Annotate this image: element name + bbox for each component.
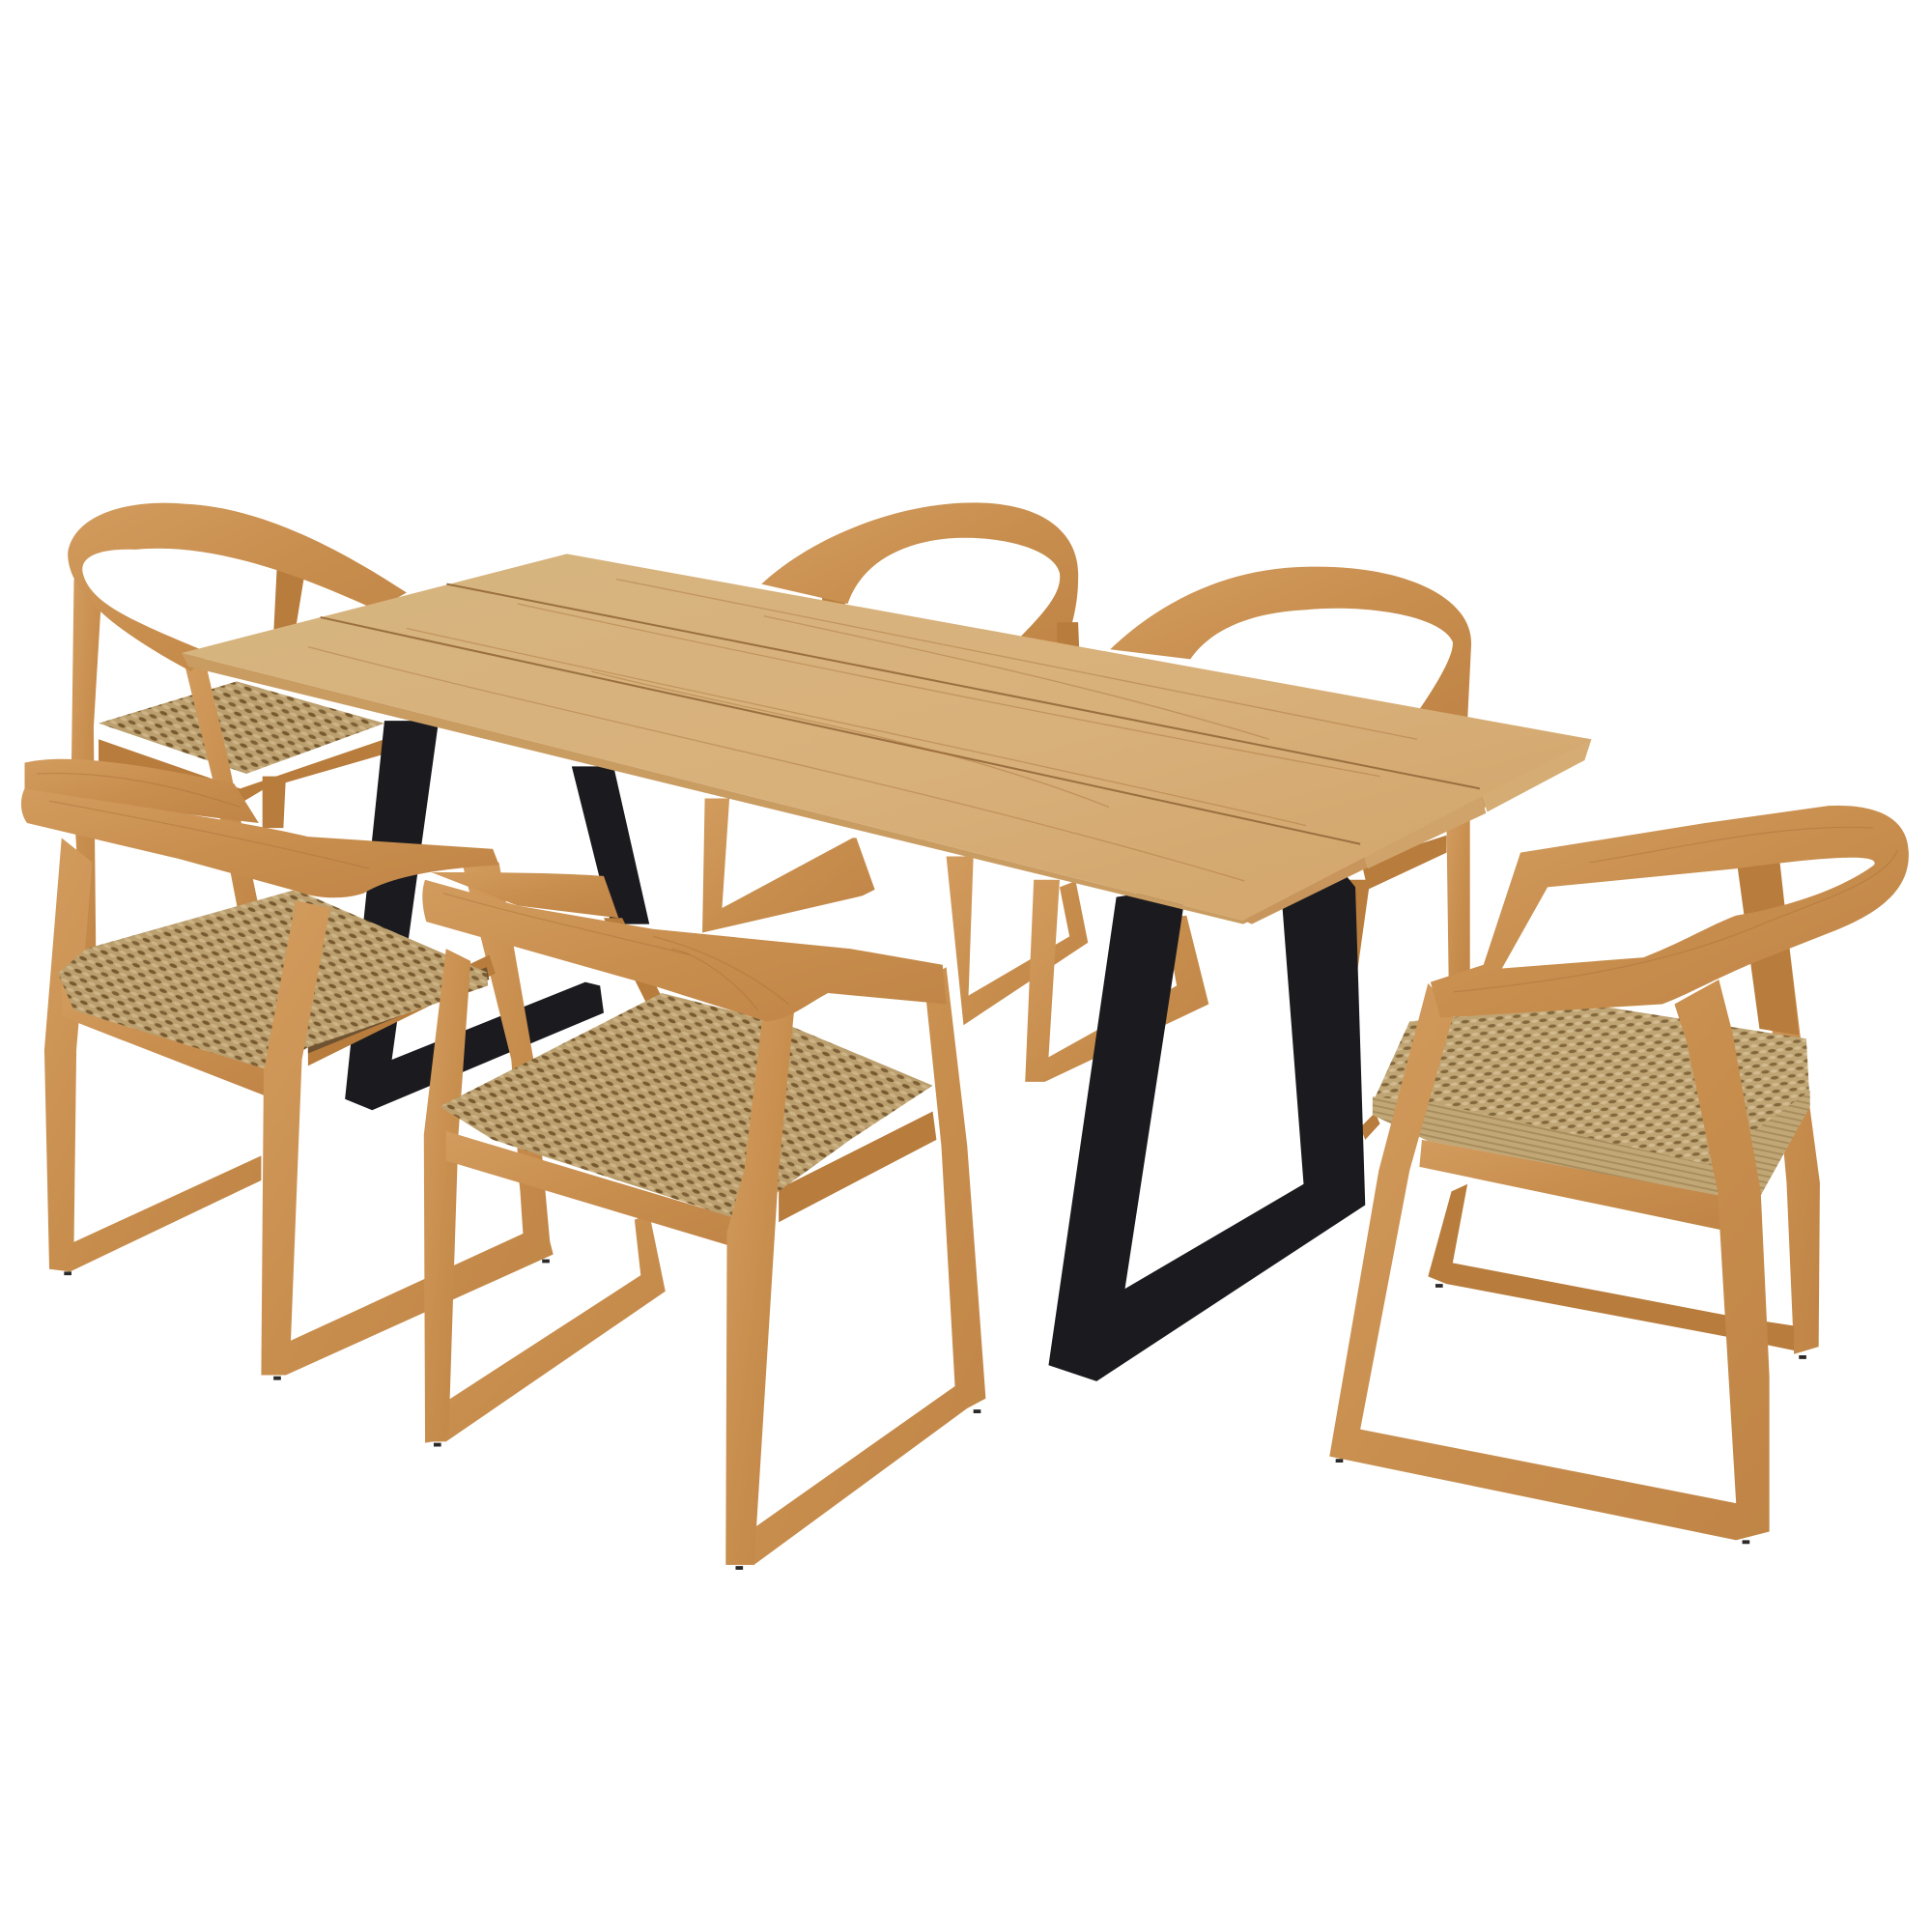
rear right leg	[263, 777, 286, 828]
chair: front middle	[422, 872, 985, 1565]
seat front rope band	[1373, 1096, 1718, 1195]
front leg	[185, 653, 269, 955]
front rail	[446, 1131, 742, 1249]
back top wedge	[25, 759, 259, 823]
second rear leg and sled	[947, 856, 1088, 1025]
left leg and sled	[1329, 980, 1770, 1540]
chair: back middle	[702, 502, 1088, 1025]
rear left leg	[71, 579, 101, 974]
lower fragment	[1360, 1113, 1380, 1140]
seat side rope band	[1708, 1091, 1810, 1195]
left leg	[424, 949, 470, 1443]
table top	[182, 554, 1591, 924]
side rail	[308, 955, 496, 1065]
plank seams	[321, 584, 1480, 844]
chair: back right	[1025, 567, 1471, 1140]
left rear leg and sled	[1025, 880, 1208, 1082]
back post	[820, 579, 850, 610]
seat rail	[99, 739, 384, 804]
table leg: near	[1048, 863, 1365, 1381]
curved back rail	[68, 503, 407, 671]
chair feet	[64, 1260, 1806, 1570]
rear post	[1736, 856, 1799, 1035]
curved back rail	[761, 502, 1078, 653]
table surface	[182, 554, 1591, 921]
woven seat	[440, 993, 933, 1220]
front left leg	[44, 838, 261, 1271]
rear left post	[604, 918, 666, 1005]
side seat rail	[1361, 836, 1446, 890]
woven seat	[99, 681, 384, 774]
rear right leg and sled	[425, 1213, 666, 1441]
centre leg	[725, 1005, 795, 1565]
right rear leg	[1446, 819, 1470, 1005]
grain	[37, 774, 370, 868]
back rail and arm	[422, 880, 947, 1021]
support post	[1057, 622, 1079, 653]
table leg: far	[345, 721, 649, 1110]
back top wedge	[431, 872, 618, 918]
table end faces	[1243, 844, 1368, 924]
woven seat	[1373, 1005, 1810, 1195]
front rail	[62, 985, 273, 1099]
grain	[443, 894, 788, 1005]
back rail and arm	[21, 788, 499, 897]
grain	[1454, 827, 1897, 992]
back post	[273, 560, 305, 635]
near rear leg and sled	[702, 799, 875, 933]
rear sled	[1428, 1184, 1794, 1350]
curved back rail	[1110, 567, 1471, 721]
curved back rail and arm	[1431, 806, 1909, 1018]
rear right leg	[462, 863, 551, 1262]
woven seat	[58, 890, 488, 1070]
seat shadow	[308, 967, 489, 1054]
centre leg and sled	[261, 900, 554, 1375]
side rail	[779, 1112, 936, 1222]
table edge	[182, 653, 1591, 924]
rear right leg	[1749, 863, 1820, 1354]
seat rail	[1419, 1140, 1720, 1230]
right leg and sled	[727, 967, 985, 1565]
chair: front right	[1329, 806, 1909, 1540]
chair: front left	[21, 759, 554, 1375]
wood grain	[308, 579, 1417, 881]
chair: back left	[68, 503, 407, 974]
front leg behind table	[1346, 880, 1370, 985]
